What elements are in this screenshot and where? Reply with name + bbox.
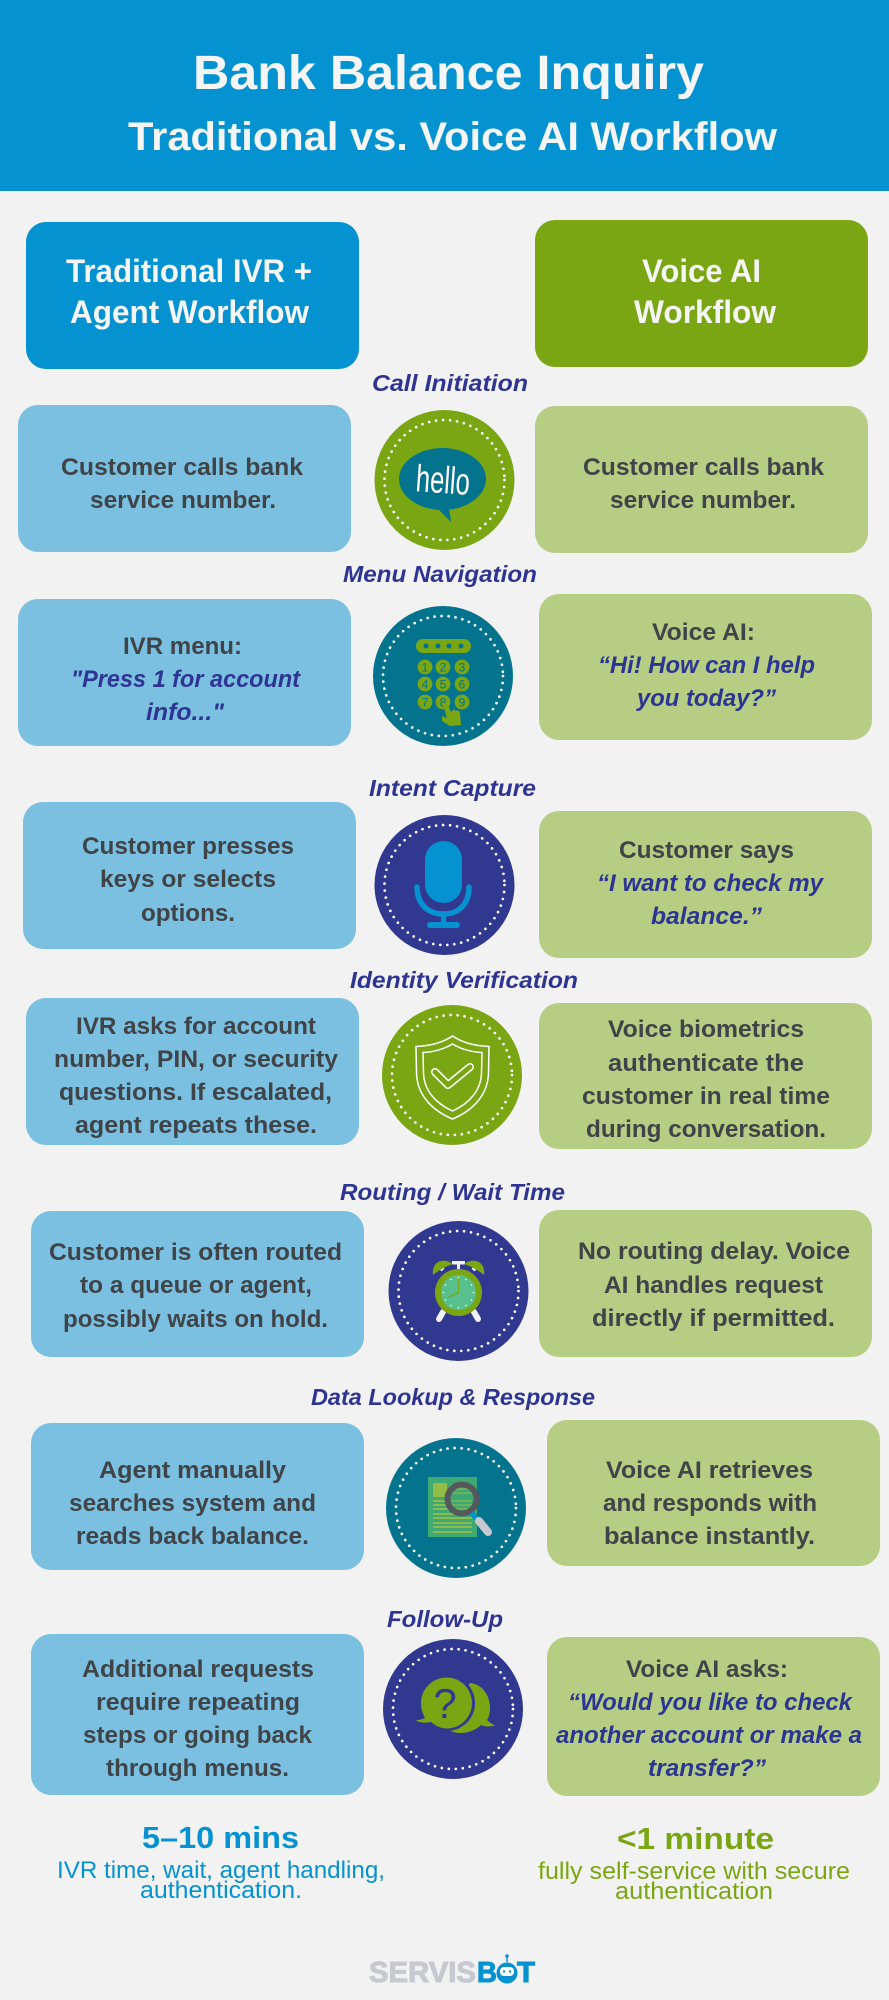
panel: menu navigation traditional: "Press 1 for account [71,666,301,693]
stat: voice AI time: authentication [615,1878,773,1905]
icon: question speech bubbles [383,1639,523,1779]
panel: intent capture voice AI: Customer says [619,837,794,864]
panel: routing voice AI [539,1210,872,1357]
panel: data lookup traditional [31,1423,364,1570]
logo: ServisBot: T [517,1957,535,1989]
heading: follow-up: Follow-Up [387,1606,503,1632]
panel: identity verification voice AI: authenticate the [608,1050,804,1077]
panel: follow-up traditional: through menus. [106,1755,289,1782]
panel: identity verification voice AI: Voice biometrics [608,1016,804,1043]
panel: data lookup voice AI: Voice AI retrieves [606,1457,813,1484]
panel: intent capture voice AI: balance.” [651,903,762,930]
heading: routing and wait time: Routing / Wait Time [340,1179,565,1205]
icon: keypad: 2 [440,660,447,674]
stat: voice AI time: <1 minute [617,1821,774,1856]
icon: shield with check [382,1005,522,1145]
panel: data lookup voice AI [547,1420,880,1566]
panel: follow-up voice AI: another account or make a [556,1722,862,1749]
panel: voice AI column heading: Voice AI [642,253,761,289]
heading: menu navigation: Menu Navigation [343,561,537,587]
panel: call initiation traditional: service number. [90,487,276,514]
panel: menu navigation traditional: IVR menu: [123,633,242,660]
panel: data lookup traditional: searches system and [69,1490,316,1517]
panel: intent capture voice AI: “I want to check my [597,870,825,897]
panel: traditional column heading [26,222,359,369]
icon: magnifier over document [386,1438,526,1578]
panel: routing voice AI: AI handles request [604,1272,823,1299]
panel: data lookup traditional: reads back balance. [76,1523,309,1550]
logo: ServisBot: SERVIS [369,1957,476,1989]
icon: keypad: 5 [440,678,447,692]
panel: follow-up traditional: Additional requests [82,1656,314,1683]
panel: call initiation voice AI: service number. [610,487,796,514]
panel: intent capture traditional: keys or selects [100,866,276,893]
panel: menu navigation voice AI [539,594,872,740]
panel: routing traditional: Customer is often routed [49,1239,342,1266]
panel: menu navigation voice AI: you today?” [636,685,776,712]
panel: identity verification traditional [26,998,359,1145]
panel: call initiation voice AI: Customer calls bank [583,454,825,481]
panel: follow-up traditional: require repeating [96,1689,300,1716]
title banner [0,0,889,191]
panel: identity verification voice AI: during conversation. [586,1116,826,1143]
panel: identity verification voice AI [539,1003,872,1149]
icon: keypad: 4 [422,678,429,692]
panel: traditional column heading: Traditional IVR + [66,253,312,289]
stat: voice AI time [538,1821,850,1905]
panel: routing traditional [31,1211,364,1357]
panel: identity verification traditional: IVR asks for account [76,1013,316,1040]
panel: routing traditional: possibly waits on hold. [63,1306,328,1333]
stat: traditional time: 5–10 mins [142,1820,299,1855]
icon: keypad: 6 [459,678,466,692]
panel: follow-up traditional [31,1634,364,1795]
panel: data lookup voice AI: and responds with [603,1490,817,1517]
heading: intent capture: Intent Capture [369,775,536,801]
panel: voice AI column heading [535,220,868,367]
icon: microphone [374,815,514,955]
icon: keypad: 8 [440,696,447,710]
icon: hello speech bubble [374,410,514,550]
panel: routing voice AI: directly if permitted. [592,1305,835,1332]
logo: ServisBot [369,1954,535,1989]
stat: voice AI time: fully self-service with secure [538,1858,850,1885]
title: Bank Balance Inquiry [193,47,704,100]
panel: follow-up voice AI: Voice AI asks: [626,1656,788,1683]
logo: ServisBot: B [477,1957,497,1989]
panel: identity verification traditional: agent repeats these. [75,1112,317,1139]
icon: keypad: 9 [459,696,466,710]
heading: data lookup and response: Data Lookup & Response [311,1384,595,1410]
panel: call initiation traditional: Customer calls bank [61,454,304,481]
heading: identity verification: Identity Verification [350,967,578,993]
panel: identity verification traditional: number, PIN, or security [54,1046,339,1073]
icon: alarm clock [388,1221,528,1361]
panel: routing traditional: to a queue or agent, [80,1272,312,1299]
panel: data lookup voice AI: balance instantly. [604,1523,815,1550]
icon: keypad: 1 [422,660,429,674]
panel: intent capture traditional: options. [141,900,235,927]
panel: call initiation traditional [18,405,351,552]
panel: menu navigation traditional [18,599,351,746]
panel: traditional column heading: Agent Workflow [70,294,309,330]
icon: keypad [373,606,513,746]
panel: intent capture voice AI [539,811,872,958]
panel: routing voice AI: No routing delay. Voice [578,1238,850,1265]
icon: hello speech bubble: hello [415,458,471,504]
icon: keypad: 3 [459,660,466,674]
stat: traditional time: IVR time, wait, agent handling, [57,1857,385,1884]
stat: traditional time [57,1820,385,1904]
heading: call initiation: Call Initiation [372,370,528,396]
panel: data lookup traditional: Agent manually [99,1457,287,1484]
panel: follow-up voice AI [547,1637,880,1796]
panel: follow-up voice AI: “Would you like to check [568,1689,854,1716]
stat: traditional time: authentication. [140,1877,302,1904]
icon: question speech bubbles: ? [433,1680,457,1727]
panel: identity verification voice AI: customer in real time [582,1083,830,1110]
panel: follow-up traditional: steps or going back [83,1722,313,1749]
panel: menu navigation traditional: info..." [146,699,225,726]
panel: intent capture traditional [23,802,356,949]
panel: follow-up voice AI: transfer?” [648,1755,766,1782]
panel: intent capture traditional: Customer presses [82,833,294,860]
panel: identity verification traditional: questions. If escalated, [59,1079,332,1106]
panel: call initiation voice AI [535,406,868,553]
panel: voice AI column heading: Workflow [634,294,776,330]
subtitle: Traditional vs. Voice AI Workflow [128,115,778,159]
icon: keypad: 7 [422,696,429,710]
panel: menu navigation voice AI: “Hi! How can I help [598,652,815,679]
panel: menu navigation voice AI: Voice AI: [652,619,755,646]
